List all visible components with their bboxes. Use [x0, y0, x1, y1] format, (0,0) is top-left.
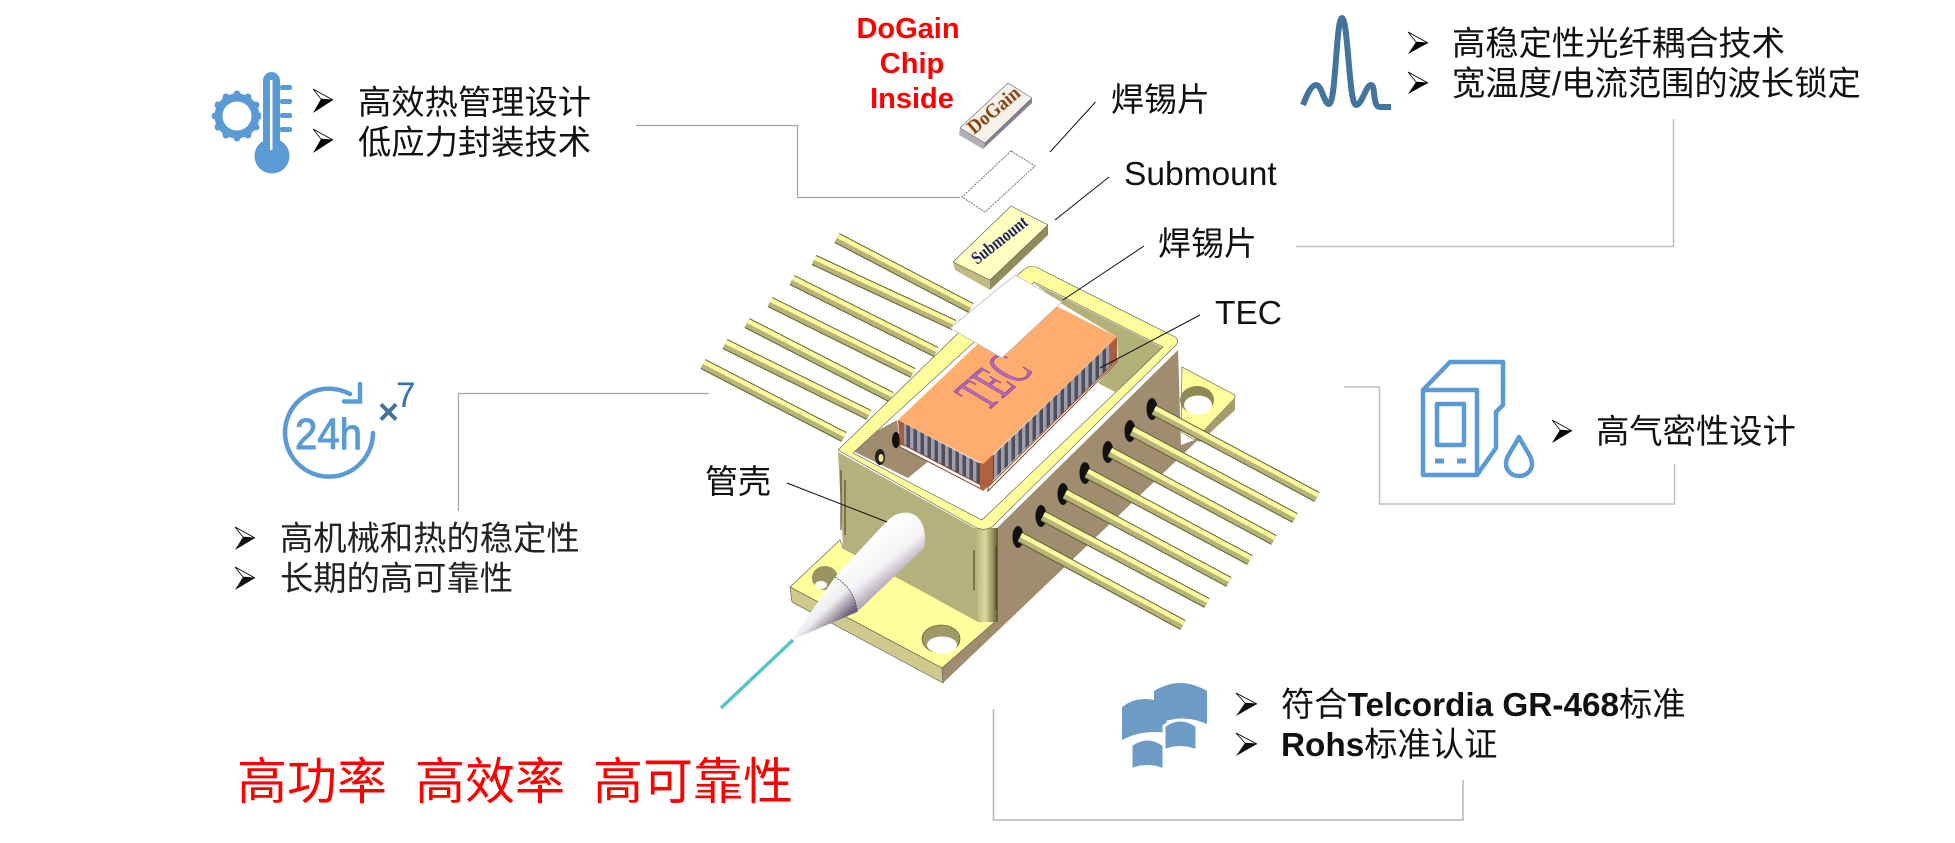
back mounting flange — [1180, 367, 1235, 442]
icon: 24h x7 clock: × — [378, 391, 399, 432]
leader and label: solder sheet 1 — [1050, 81, 1210, 152]
text block: thermal management: 高效热管理设计 — [358, 85, 591, 122]
icon: standards documents — [1122, 683, 1207, 770]
DoGain chip: DoGain — [963, 82, 1025, 139]
title: high power, efficiency, reliability: 高功率 — [237, 754, 387, 810]
front wall — [838, 452, 998, 622]
solder sheet on TEC — [950, 275, 1062, 358]
heading: DoGain Chip Inside: Chip — [880, 48, 944, 80]
heading: DoGain Chip Inside: DoGain — [856, 13, 960, 45]
leader and label: solder sheet 1: 焊锡片 — [1111, 81, 1210, 118]
text block: standards compliance — [1236, 687, 1686, 764]
text block: thermal management — [313, 85, 591, 162]
ferrule — [792, 513, 925, 640]
leader and label: solder sheet 2 — [1063, 225, 1257, 300]
connector: left feature to package — [458, 394, 709, 511]
icon: sealed box and drop — [1423, 362, 1532, 476]
text block: fiber coupling: 高稳定性光纤耦合技术 — [1452, 26, 1785, 63]
package illustration — [703, 82, 1318, 708]
text block: hermetic design: 高气密性设计 — [1596, 414, 1796, 451]
right pins — [1012, 398, 1318, 625]
icon: 24h x7 clock: 24h — [295, 410, 362, 459]
leader and label: TEC — [1100, 295, 1282, 368]
text block: standards compliance: 符合Telcordia GR-468标准 — [1281, 687, 1686, 724]
text block: fiber coupling: 宽温度/电流范围的波长锁定 — [1452, 66, 1861, 103]
connector: top-right feature to solder sheet — [1296, 119, 1674, 246]
upper solder sheet — [962, 151, 1035, 212]
heading: DoGain Chip Inside: Inside — [870, 83, 954, 115]
text block: fiber coupling — [1408, 26, 1861, 103]
top rim — [838, 266, 1178, 529]
text block: standards compliance: Rohs标准认证 — [1281, 727, 1497, 764]
leader and label: Submount: Submount — [1124, 156, 1277, 193]
icon: spectrum wave — [1303, 18, 1391, 107]
icon: thermometer and sun gear — [212, 69, 292, 174]
leader and label: TEC: TEC — [1215, 295, 1282, 332]
title: high power, efficiency, reliability: 高效率 — [415, 754, 565, 810]
optical fiber — [721, 640, 793, 708]
text block: mechanical stability — [235, 521, 580, 598]
text block: mechanical stability: 长期的高可靠性 — [280, 561, 513, 598]
left pins — [703, 236, 972, 437]
front flange — [790, 540, 997, 683]
right wall and flange side — [942, 350, 1200, 683]
text block: thermal management: 低应力封装技术 — [358, 125, 591, 162]
TEC label on cooler: TEC — [942, 345, 1046, 419]
TEC cooler — [898, 293, 1117, 491]
text block: mechanical stability: 高机械和热的稳定性 — [280, 521, 580, 558]
heading: DoGain Chip Inside — [856, 13, 960, 115]
connector: top-left feature to solder sheet — [636, 126, 960, 198]
connector: mid-right feature to package — [1344, 387, 1674, 504]
cavity interior — [853, 282, 1163, 520]
icon: 24h x7 clock: 7 — [396, 376, 415, 415]
connector: bottom feature to package — [994, 709, 1463, 820]
leader and label: housing — [705, 463, 887, 522]
leader and label: solder sheet 2: 焊锡片 — [1158, 225, 1257, 262]
submount block: Submount — [967, 212, 1031, 268]
leader and label: housing: 管壳 — [705, 463, 771, 500]
submount block — [953, 206, 1048, 290]
leader and label: Submount — [1055, 156, 1277, 220]
title: high power, efficiency, reliability: 高可靠性 — [593, 754, 793, 810]
icon: 24h x7 clock — [285, 376, 415, 477]
